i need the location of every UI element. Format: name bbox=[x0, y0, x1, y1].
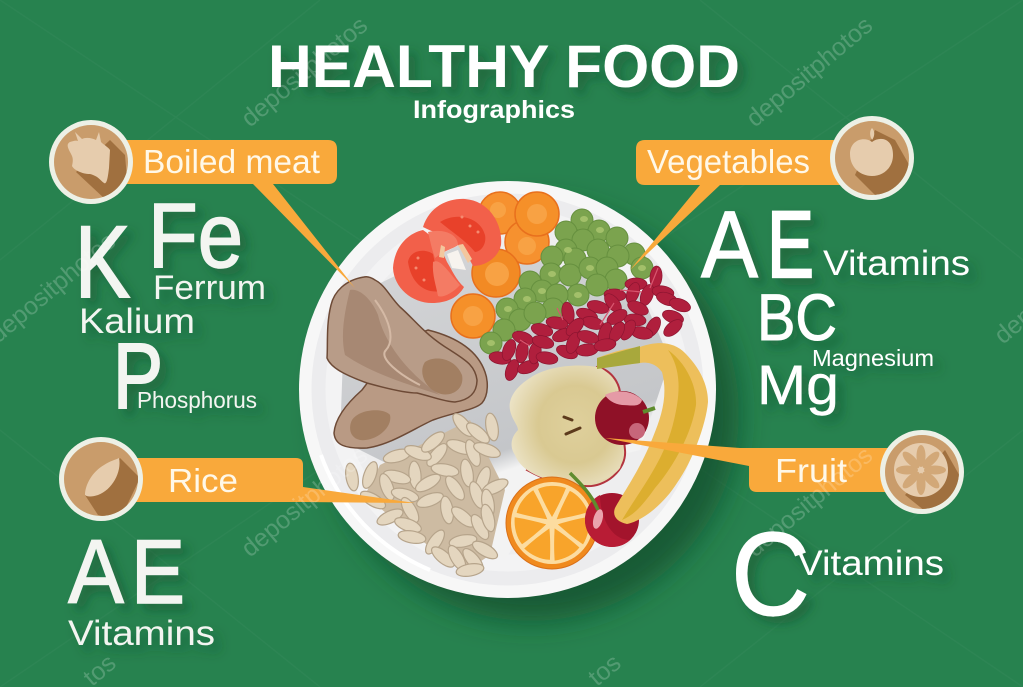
vegetables nutrients: Mg bbox=[757, 353, 839, 416]
label: fruit bbox=[605, 430, 965, 515]
vegetables nutrients bbox=[701, 192, 970, 416]
boiled meat nutrients: Kalium bbox=[79, 302, 195, 341]
plate shadow bbox=[323, 205, 739, 621]
icon: cow bbox=[68, 132, 110, 183]
boiled meat nutrients: P bbox=[113, 324, 163, 428]
label: boiled meat bbox=[49, 120, 355, 288]
vegetables nutrients: E bbox=[767, 192, 814, 298]
title: HEALTHY FOOD bbox=[268, 33, 740, 100]
peas bbox=[480, 209, 653, 354]
boiled meat bbox=[327, 277, 487, 448]
boiled meat nutrients bbox=[75, 185, 266, 428]
orange slice bbox=[506, 477, 598, 569]
watermarks: depositphotos bbox=[741, 11, 878, 133]
watermarks: depositphotos bbox=[236, 11, 373, 133]
label text: boiled meat: Boiled meat bbox=[143, 143, 320, 180]
vegetables nutrients: Vitamins bbox=[823, 244, 970, 283]
label text: rice: Rice bbox=[168, 462, 238, 499]
tomatoes bbox=[393, 199, 501, 303]
subtitle: Infographics bbox=[413, 96, 575, 124]
fruit nutrients bbox=[731, 508, 944, 641]
boiled meat nutrients: Ferrum bbox=[153, 269, 266, 307]
banana bbox=[597, 343, 708, 524]
kidney beans bbox=[488, 266, 692, 382]
icon: citrus slice bbox=[894, 443, 948, 497]
label text: fruit: Fruit bbox=[775, 452, 847, 489]
rice nutrients: Vitamins bbox=[68, 614, 215, 653]
rice bbox=[344, 410, 510, 578]
rice nutrients bbox=[68, 522, 215, 653]
vegetables nutrients: BC bbox=[757, 280, 837, 354]
fruit nutrients: Vitamins bbox=[797, 544, 944, 583]
watermarks: depositphotos bbox=[741, 441, 878, 563]
label: rice bbox=[59, 437, 415, 521]
label: vegetables bbox=[630, 116, 915, 270]
boiled meat nutrients: Phosphorus bbox=[137, 387, 257, 413]
boiled meat nutrients: K bbox=[75, 205, 130, 319]
carrots bbox=[451, 192, 559, 338]
watermarks: depositphotos bbox=[236, 441, 373, 563]
cherry on orange bbox=[570, 473, 639, 547]
cherry on apple bbox=[595, 391, 655, 445]
apple half bbox=[510, 365, 625, 486]
icon: apple bbox=[850, 128, 893, 176]
boiled meat nutrients: Fe bbox=[148, 185, 243, 287]
vegetables nutrients: A bbox=[701, 192, 759, 298]
label text: vegetables: Vegetables bbox=[647, 143, 810, 180]
fruit nutrients: C bbox=[731, 508, 810, 641]
icon: rice grain bbox=[85, 458, 120, 496]
vegetables nutrients: Magnesium bbox=[812, 345, 934, 371]
plate bbox=[299, 181, 716, 598]
rice nutrients: A bbox=[68, 522, 124, 623]
rice nutrients: E bbox=[131, 522, 185, 623]
